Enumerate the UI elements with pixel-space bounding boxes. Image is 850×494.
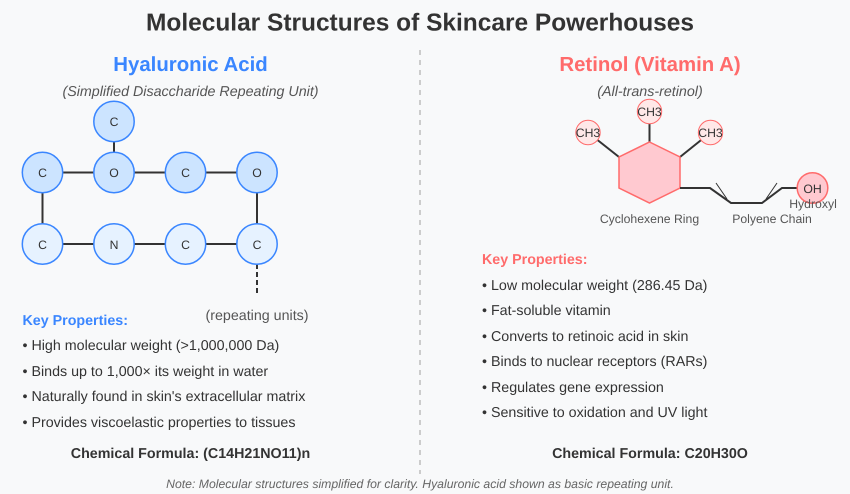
molecule diagram: disaccharide unit: N — [110, 238, 118, 252]
molecule diagram: disaccharide unit: C — [181, 238, 190, 252]
label: repeating units: (repeating units) — [205, 308, 309, 324]
key properties: hyaluronic acid: • High molecular weight (>1,000,000 Da) — [22, 338, 279, 354]
molecule diagram: disaccharide unit: C — [253, 238, 262, 252]
key properties: hyaluronic acid: • Provides viscoelastic properties to tissues — [22, 415, 295, 431]
cyclohexene ring — [619, 142, 680, 203]
key properties: retinol: • Regulates gene expression — [482, 380, 664, 396]
key properties: hyaluronic acid: • Naturally found in skin's extracellular matrix — [22, 389, 305, 405]
polyene chain — [680, 183, 797, 203]
key properties: hyaluronic acid — [22, 313, 305, 431]
molecule diagram: retinol: OH — [803, 182, 822, 196]
molecule diagram: disaccharide unit: C — [38, 166, 47, 180]
footnote: Note: Molecular structures simplified for clarity. Hyaluronic acid shown as basic repeating unit. — [166, 477, 674, 491]
key properties: retinol: • Binds to nuclear receptors (RARs) — [482, 354, 707, 370]
heading: hyaluronic acid: Hyaluronic Acid — [113, 54, 268, 76]
key properties: retinol: • Fat-soluble vitamin — [482, 303, 611, 319]
panel: hyaluronic acid — [22, 54, 319, 462]
key properties: retinol: • Low molecular weight (286.45 Da) — [482, 278, 707, 294]
heading: retinol: Retinol (Vitamin A) — [559, 54, 741, 76]
molecule diagram: retinol: CH3 — [576, 126, 600, 140]
panel: retinol — [482, 54, 837, 462]
molecule diagram: disaccharide unit — [22, 101, 277, 294]
molecule diagram: disaccharide unit: C — [38, 238, 47, 252]
molecule diagram: retinol: CH3 — [698, 126, 723, 140]
chemical formula: hyaluronic acid: Chemical Formula: (C14H21NO11)n — [71, 446, 310, 462]
molecule diagram: retinol: Cyclohexene Ring — [600, 212, 699, 226]
title: Molecular Structures of Skincare Powerhouses — [146, 10, 694, 36]
molecule diagram: retinol: Hydroxyl — [789, 197, 837, 211]
molecule diagram: retinol: CH3 — [637, 105, 662, 119]
chemical formula: retinol: Chemical Formula: C20H30O — [552, 446, 748, 462]
key properties: retinol — [482, 252, 707, 421]
key properties: hyaluronic acid: • Binds up to 1,000× its weight in water — [22, 364, 268, 380]
molecule diagram: disaccharide unit: O — [252, 166, 262, 180]
molecule diagram: disaccharide unit: C — [181, 166, 190, 180]
molecule diagram: disaccharide unit: O — [109, 166, 119, 180]
key properties: retinol: • Converts to retinoic acid in skin — [482, 329, 688, 345]
subtitle: hyaluronic acid: (Simplified Disaccharide Repeating Unit) — [62, 84, 319, 100]
molecule diagram: retinol: Polyene Chain — [732, 212, 812, 226]
key properties: hyaluronic acid: Key Properties: — [22, 313, 128, 329]
molecule diagram: retinol — [576, 99, 837, 226]
subtitle: retinol: (All-trans-retinol) — [597, 84, 703, 100]
molecule diagram: disaccharide unit: C — [110, 115, 119, 129]
key properties: retinol: Key Properties: — [482, 252, 587, 268]
key properties: retinol: • Sensitive to oxidation and UV light — [482, 405, 707, 421]
